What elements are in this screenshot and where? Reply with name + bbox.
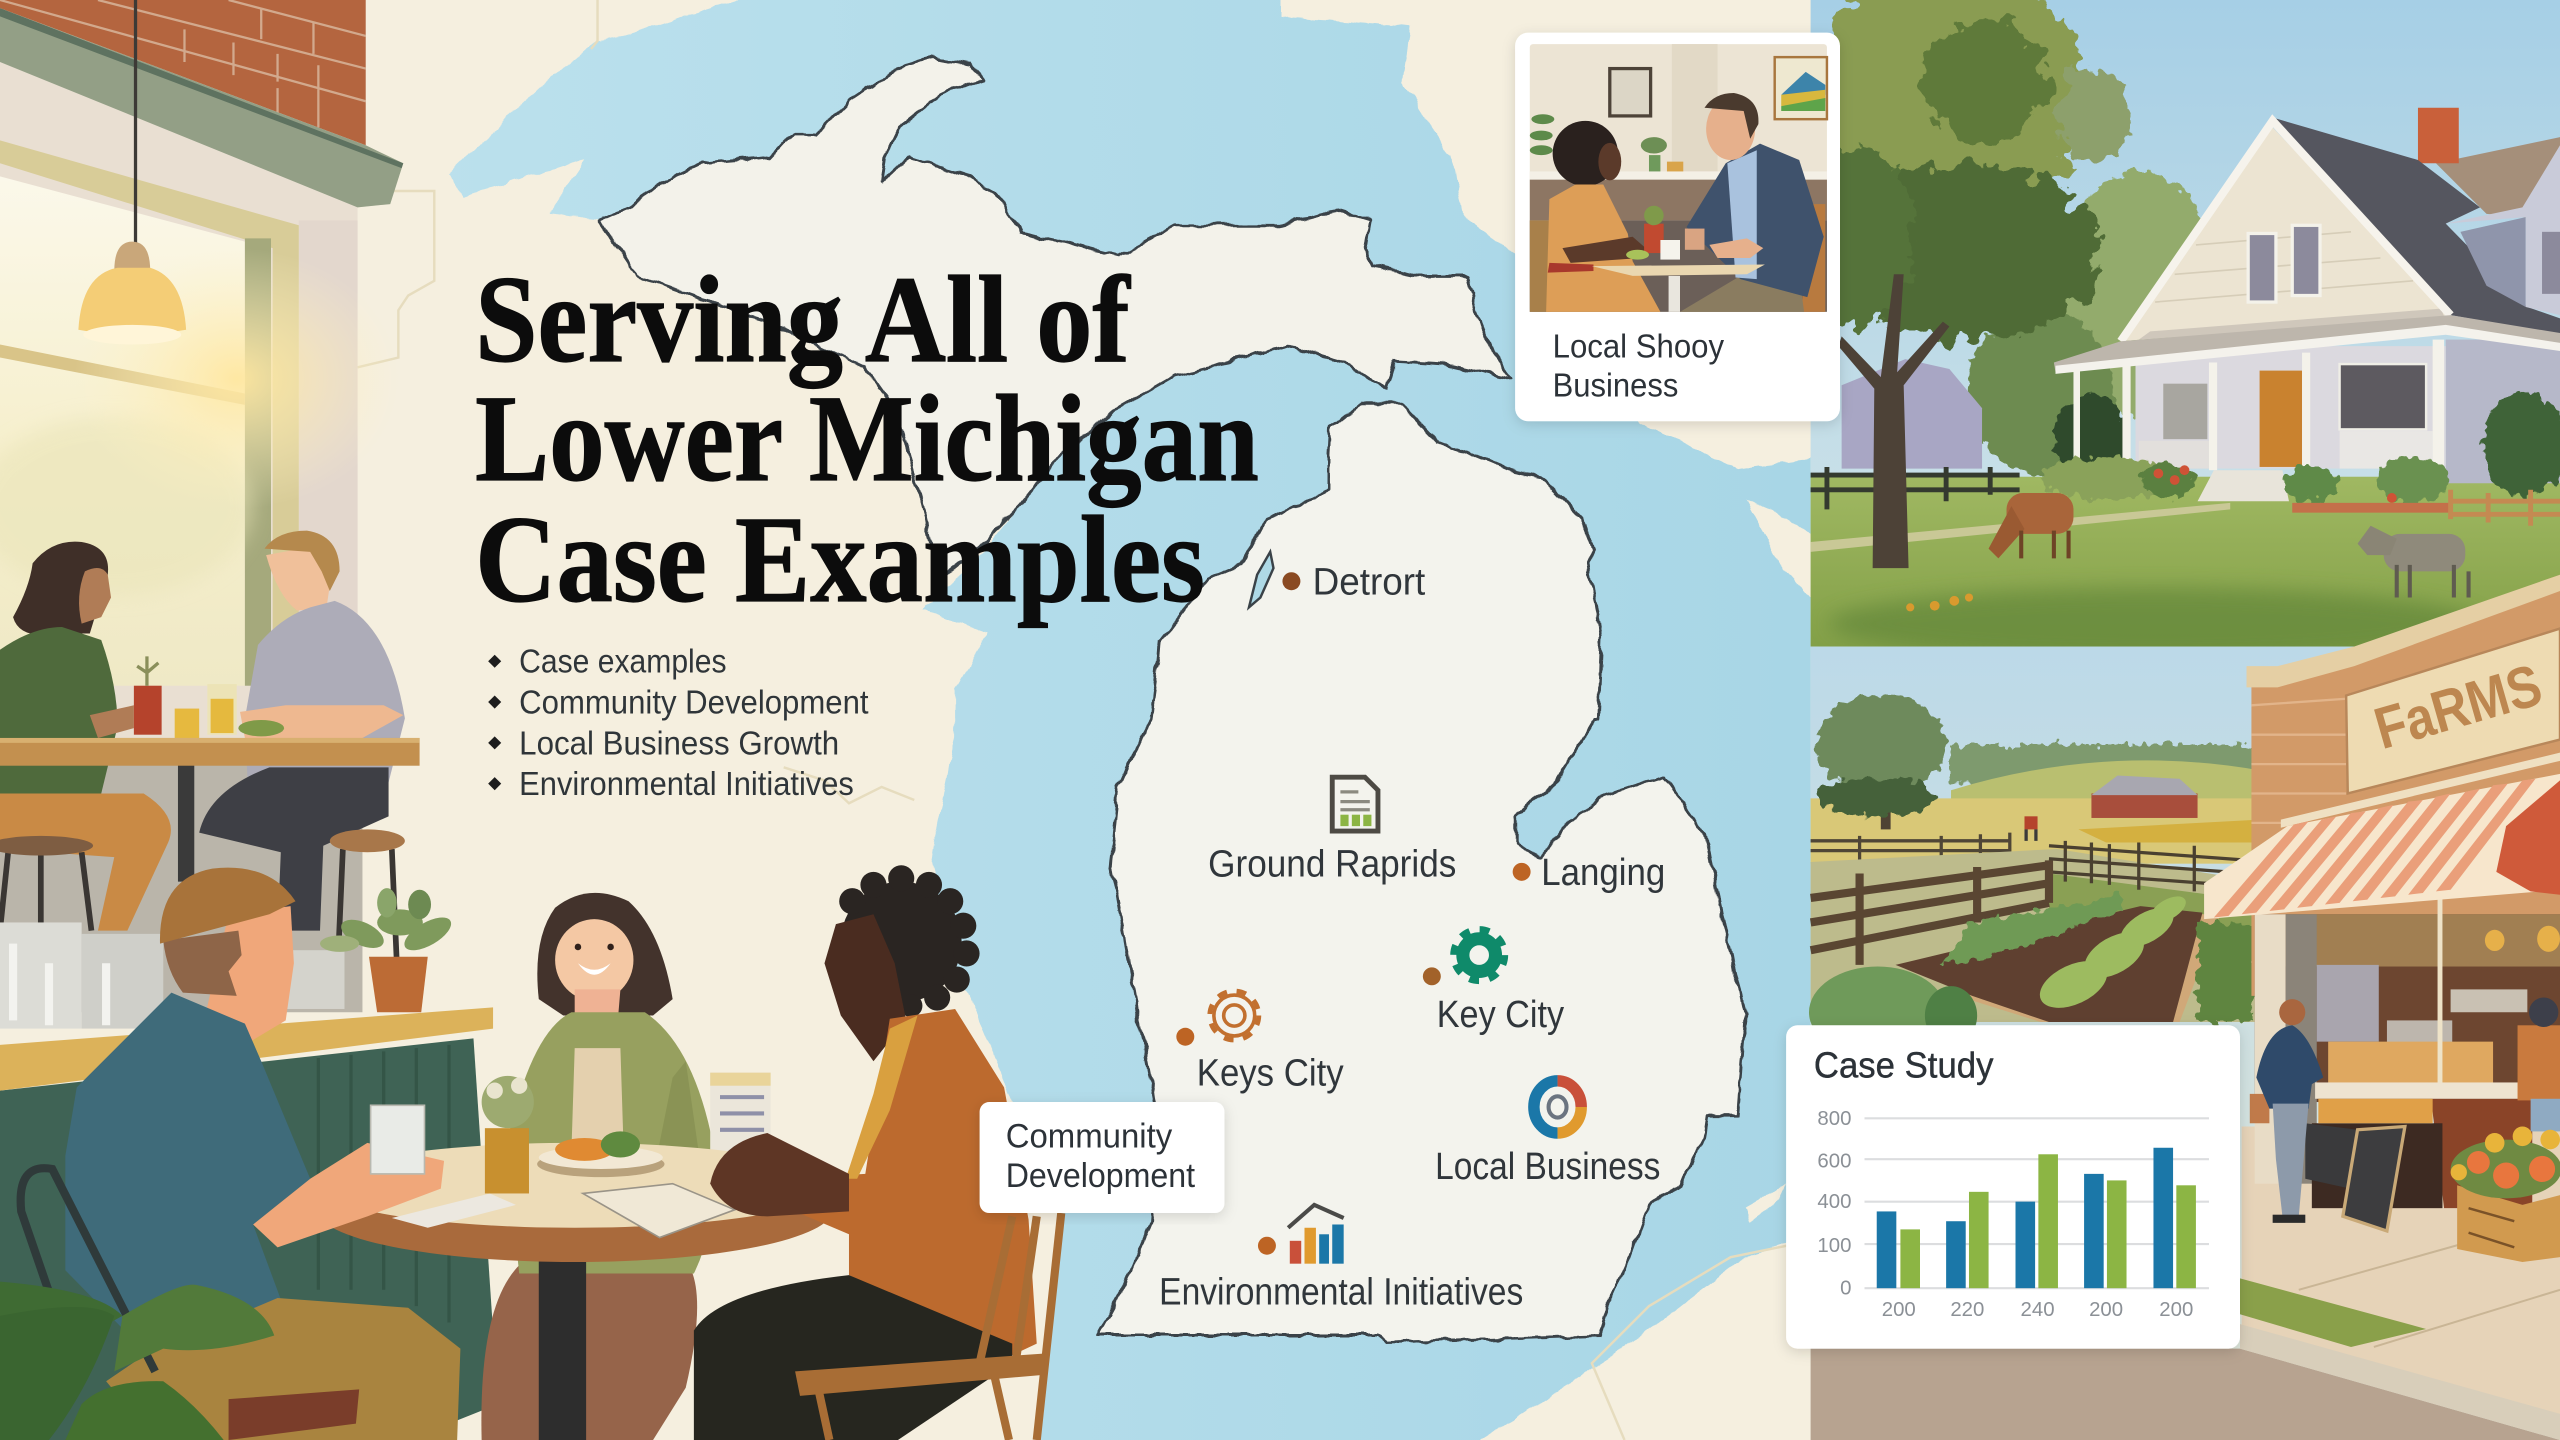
market: striped awning (2204, 774, 2560, 919)
icon: green gear (1454, 930, 1504, 980)
farmhouse: gray cow (2358, 526, 2469, 598)
farmhouse: background trees (1967, 171, 2220, 480)
market: strip below sign (2281, 753, 2560, 828)
map label: Key City: Key City (1437, 993, 1564, 1035)
farm: green strip (2049, 873, 2260, 931)
map label: Environmental Initiatives (1159, 1237, 1523, 1312)
chart bars (1877, 1148, 2196, 1288)
cafe: drinks on bar (134, 656, 284, 738)
farmhouse: flowers in grass (1906, 593, 1973, 611)
cafe: counter (0, 1007, 498, 1440)
market: grass strip (2240, 1278, 2426, 1347)
cafe: bar table (0, 738, 420, 882)
callout: Community Development: Development (1006, 1157, 1196, 1195)
farmhouse: distant house (1842, 359, 1982, 469)
cafe: foreground man (65, 868, 460, 1440)
cafe: stools (0, 829, 405, 999)
cafe: cornice (0, 8, 403, 207)
market: flower crate (2451, 1127, 2560, 1262)
land: Ohio shore (1435, 1224, 1845, 1440)
cafe: counter plant (320, 888, 456, 1012)
cafe: round table (317, 1143, 833, 1440)
cafe: brick wall (0, 0, 366, 145)
cafe: chair right (816, 1213, 1061, 1440)
market: FARMS sign (2346, 629, 2560, 793)
farm: leaf row (2033, 891, 2190, 1017)
chart x axis labels: 220 (1950, 1299, 1984, 1321)
cafe: menu (710, 1073, 771, 1154)
land: small island southeast (1745, 1184, 1786, 1221)
farmhouse: right fence (2292, 490, 2560, 526)
market: sidewalk (2242, 1127, 2560, 1417)
map label: Keys City (1176, 1028, 1344, 1094)
chart x axis labels: 200 (2089, 1299, 2123, 1321)
land: Ontario (1280, 0, 1845, 469)
chart x axis labels: 200 (2159, 1299, 2193, 1321)
farmhouse: red flowers (2153, 465, 2397, 503)
market: chalkboards (2305, 1123, 2405, 1231)
chart gridlines (1864, 1118, 2209, 1288)
farm: big leaves (1809, 967, 1977, 1058)
farm: right plants (2198, 922, 2253, 1022)
land: west shore (0, 0, 1176, 1440)
cafe: hanging lamp (78, 0, 186, 344)
land: small island east (1745, 500, 1845, 637)
farmhouse: main house (2054, 108, 2560, 501)
cafe: back couple, man (199, 531, 405, 931)
cafe: plate, flowers and papers (392, 1076, 735, 1238)
market: shop interior (2255, 891, 2560, 1208)
farm: tree line and hill (1951, 744, 2261, 808)
illustration: cafe scene (0, 0, 1061, 1440)
cafe: chair left (21, 1168, 359, 1440)
callout: Community Development (980, 1102, 1224, 1213)
farm: person in field (2024, 816, 2038, 841)
farmhouse: path (1811, 503, 2230, 552)
card photo (1530, 44, 1827, 312)
card: Local Shooy Business: Business (1553, 368, 1678, 405)
farmhouse: shrubs (2041, 392, 2560, 503)
title (475, 250, 1259, 628)
map: thin peninsula near Traverse Bay (1249, 552, 1273, 607)
cafe: under-table backdrop (0, 764, 362, 1012)
icon: donut (1534, 1081, 1581, 1133)
bullet list: Community Development (519, 684, 869, 721)
chart title: Case Study (1814, 1045, 1994, 1086)
icon: document (1332, 777, 1378, 831)
chart y axis labels: 800 (1817, 1108, 1851, 1130)
chart y axis labels (1817, 1108, 1851, 1300)
card: Case Study chart (1786, 1025, 2240, 1349)
curly hair (839, 865, 980, 1017)
chart y axis labels: 600 (1817, 1150, 1851, 1172)
map label: Local Business: Local Business (1435, 1145, 1660, 1187)
illustration: farm and market panel (1809, 575, 2560, 1440)
bullet list (488, 644, 869, 803)
card: Local Shooy Business (1515, 33, 1840, 421)
illustration: farmhouse panel (1799, 0, 2560, 660)
cafe: wall and window (0, 62, 400, 767)
market: curb (2240, 1324, 2560, 1440)
icon: orange gear (1210, 991, 1259, 1040)
farm: garden soil (1896, 906, 2202, 1022)
farm: big tree (1816, 696, 1946, 829)
farmhouse: big tree (1799, 0, 2131, 568)
map label: Keys City: Keys City (1197, 1052, 1344, 1094)
map: Lower Peninsula outline (1097, 403, 1745, 1342)
bullet list: Environmental Initiatives (519, 766, 854, 803)
cafe: jars on counter (0, 922, 344, 1029)
cafe: foreground right person (694, 865, 1037, 1440)
title: Case Examples (475, 490, 1205, 628)
map label: Ground Raprids: Ground Raprids (1208, 843, 1456, 885)
chart y axis labels: 400 (1817, 1191, 1851, 1213)
cafe: center woman (481, 893, 714, 1440)
farmhouse: left fence (1811, 467, 2020, 509)
chart y axis labels: 0 (1840, 1278, 1851, 1300)
map: Upper Peninsula outline (599, 57, 1512, 580)
map label: Key City (1423, 967, 1564, 1035)
map label: Detrort: Detrort (1313, 560, 1426, 602)
farm: path (1958, 914, 2220, 1022)
bullet list: Local Business Growth (519, 725, 839, 762)
farm: field (1811, 798, 2260, 864)
farm: spiky plant row (1940, 895, 2122, 963)
market: customer (2250, 999, 2323, 1223)
farm: crop band (1811, 849, 2260, 1022)
farm: near fence (1811, 860, 2049, 965)
farmhouse: tree shadow (1829, 588, 2482, 660)
map label: Environmental Initiatives: Environmental Initiatives (1159, 1270, 1523, 1312)
farm: far fence (1811, 833, 2011, 860)
farmhouse: brown cow (1989, 493, 2073, 558)
market: sidewalk joints (2299, 1216, 2560, 1347)
farm: gold band (2078, 820, 2260, 842)
chart x axis labels: 200 (1882, 1299, 1916, 1321)
chart y axis labels: 100 (1817, 1235, 1851, 1257)
map label: Langing: Langing (1541, 851, 1665, 893)
callout: Community Development: Community (1006, 1118, 1173, 1156)
icon: environmental chart (1288, 1205, 1344, 1264)
market: hanging lamps (2485, 926, 2560, 952)
title: Serving All of (475, 250, 1131, 389)
farmhouse: lawn (1811, 477, 2560, 647)
chart x axis labels: 240 (2021, 1299, 2055, 1321)
map background (0, 0, 1845, 1440)
farm: red barn (2091, 776, 2198, 818)
bullet list: Case examples (519, 644, 727, 681)
market: vendor (2518, 998, 2560, 1131)
farm: right fence (2049, 841, 2250, 891)
cafe: chair seat (795, 1353, 1045, 1396)
chart x axis labels (1882, 1299, 2193, 1321)
cafe: foreground plant (0, 1282, 274, 1440)
market: road (1811, 1349, 2560, 1440)
cafe: back couple, woman (0, 542, 171, 931)
title: Lower Michigan (475, 369, 1259, 508)
market: brick building (2247, 575, 2560, 996)
card: Local Shooy Business: Local Shooy (1553, 329, 1724, 366)
